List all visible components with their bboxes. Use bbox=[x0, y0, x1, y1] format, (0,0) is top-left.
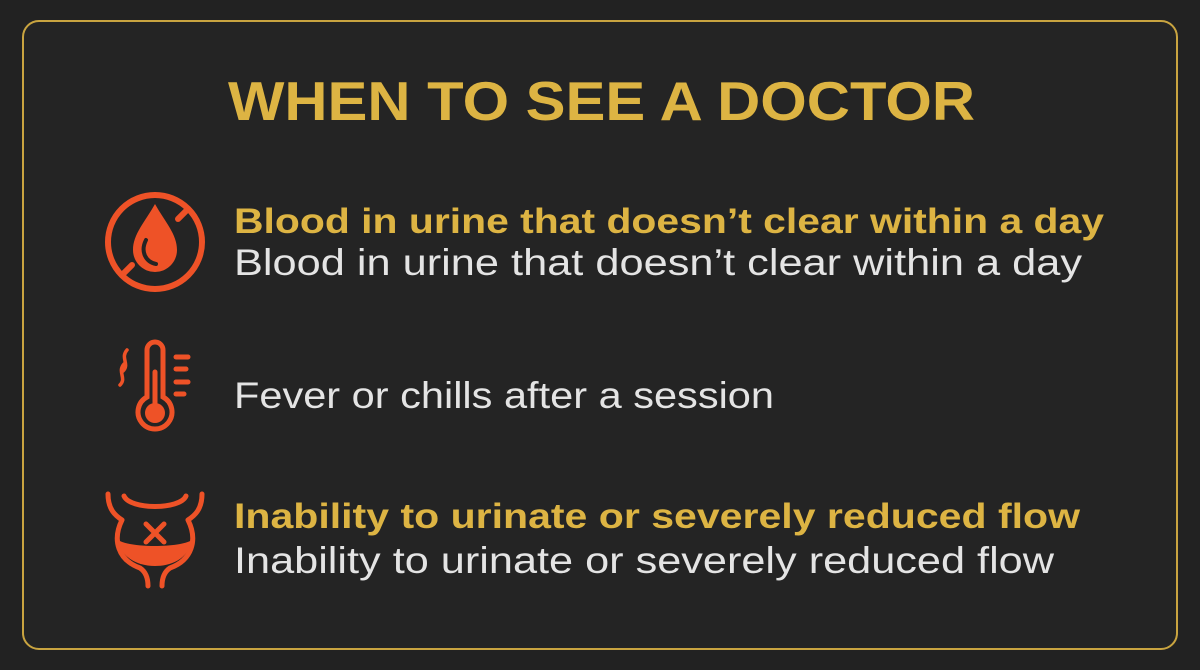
text: blood: Blood in urine that doesn’t clear within a day bbox=[234, 242, 1083, 283]
item: blood in urine bbox=[108, 195, 1105, 289]
item: urination bbox=[108, 494, 1081, 586]
title: WHEN TO SEE A DOCTOR bbox=[228, 70, 975, 132]
icon: no blood drop bbox=[108, 195, 202, 289]
heading: urination: Inability to urinate or severely reduced flow bbox=[234, 497, 1081, 536]
heading: blood: Blood in urine that doesn’t clear within a day bbox=[234, 202, 1105, 241]
text: urination: Inability to urinate or severely reduced flow bbox=[234, 540, 1054, 581]
text: fever: Fever or chills after a session bbox=[234, 375, 774, 416]
item: fever bbox=[120, 342, 774, 429]
icon: bladder bbox=[108, 494, 202, 586]
icon: thermometer bbox=[120, 342, 188, 429]
